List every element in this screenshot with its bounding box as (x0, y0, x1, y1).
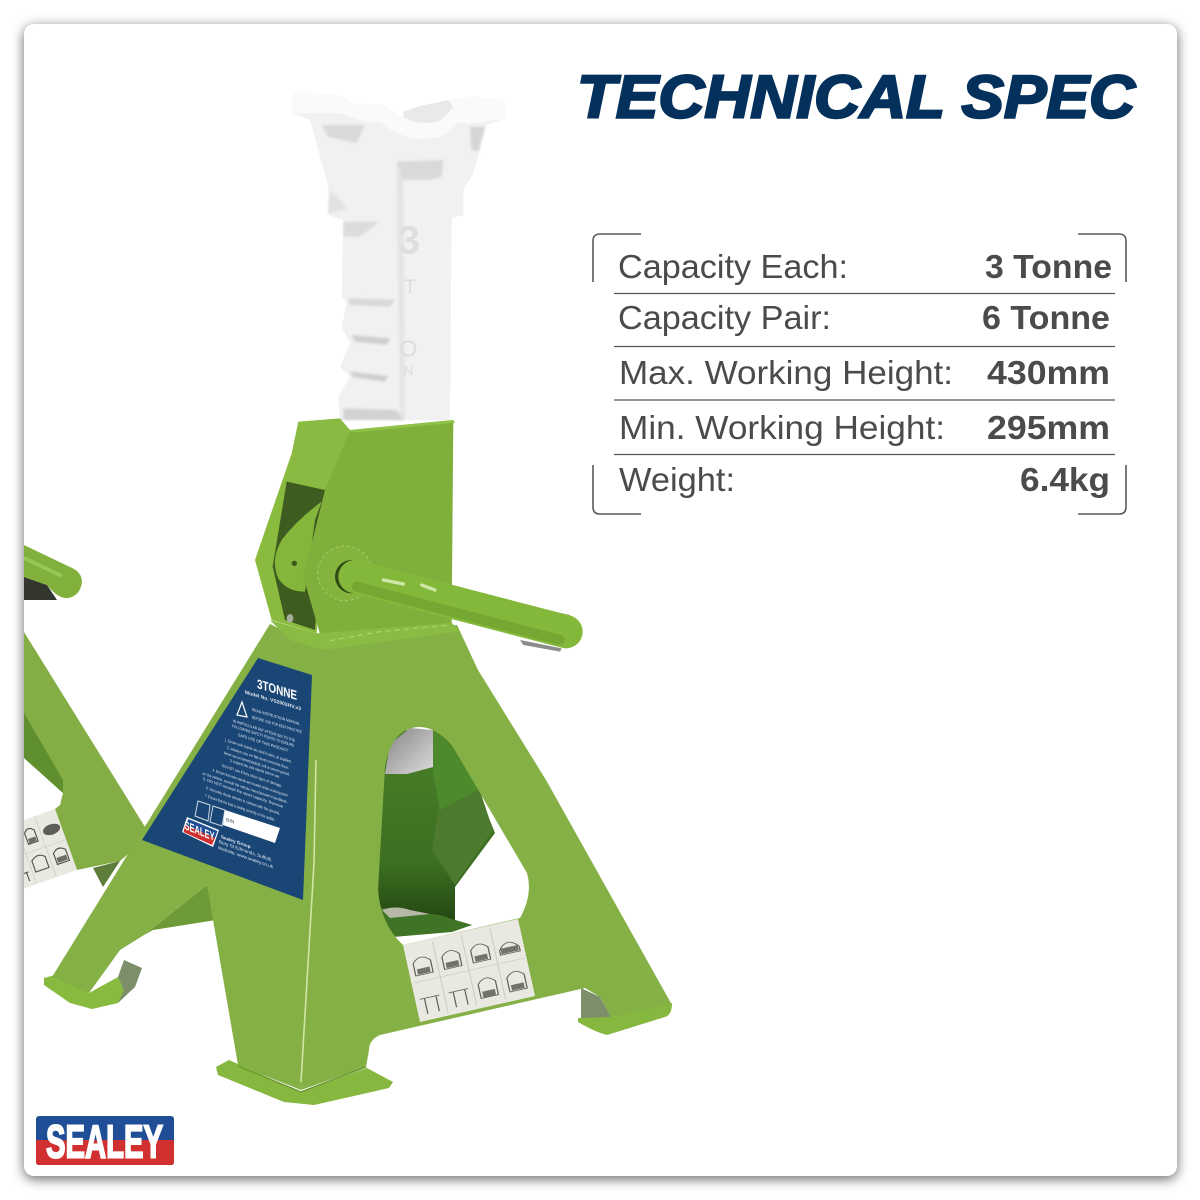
ram housing head (255, 418, 460, 650)
row: max working height: 430mm (987, 354, 1110, 391)
sticker drawings (412, 942, 528, 1014)
label text (202, 676, 302, 822)
row: capacity each: Capacity Each: (618, 248, 848, 285)
label text: 5. DO NOT exceed the rated capacity. Remove (203, 776, 284, 809)
left foot (118, 960, 142, 1003)
warning triangle icon (237, 702, 247, 717)
label Sealey logo (182, 817, 219, 847)
ram / saddle: 3 (398, 218, 420, 262)
row: capacity each: 3 Tonne (985, 248, 1112, 285)
row: capacity pair: Capacity Pair: (618, 299, 831, 336)
label text: READ INSTRUCTION MANUAL (252, 707, 301, 726)
label text: 2. Always use on flat level concrete floor. (227, 745, 289, 770)
left face of frame (52, 624, 323, 1090)
row: capacity pair (618, 299, 1110, 336)
right foot (581, 988, 611, 1020)
rear axle stand (24, 545, 145, 888)
label text: SAFE USE OF THIS PRODUCT (238, 732, 288, 753)
row: weight (619, 461, 1110, 498)
BIN field: BIN (226, 817, 235, 826)
hole interior wall (378, 730, 495, 936)
axle stands illustration (0, 92, 672, 1105)
inner notch (144, 885, 216, 935)
label address (218, 834, 274, 870)
label text: 3TONNE (257, 676, 297, 703)
label text: IN PARTICULAR PAY ATTENTION TO THE (233, 718, 295, 743)
row: capacity each (618, 248, 1112, 285)
blue warning label (142, 658, 312, 900)
label text: 6. Securely chock wheels in contact with the ground. (206, 785, 280, 816)
hole background (378, 727, 529, 945)
row: min working height (619, 409, 1110, 446)
label text: 1. Ensure axle stands are used in pairs, as supplied. (224, 737, 292, 764)
row: min working height: 295mm (987, 409, 1110, 446)
base frame (44, 624, 672, 1105)
corner brackets (593, 234, 1126, 514)
BIN field (223, 810, 280, 843)
front foot (216, 1060, 393, 1105)
label text: FOLLOWING SAFETY POINTS TO ENSURE (232, 723, 294, 748)
ram / saddle: N (404, 363, 413, 378)
side plate (255, 422, 327, 633)
label text: DO NOT use if they show signs of damage. (222, 763, 282, 788)
soft ram shading (322, 125, 485, 420)
Sealey logo: SEALEY (46, 1116, 163, 1168)
handle bar (335, 560, 570, 652)
weld collar (318, 546, 372, 601)
ram / saddle: O (399, 336, 417, 362)
base top weld seam (270, 620, 460, 650)
right face of frame (301, 625, 672, 1090)
label text: Never use on tarmac/asphalt, soft or uneven ground. (224, 750, 290, 777)
label text: on the vehicle, consult the vehicle manufacturer's handbook. (202, 771, 288, 804)
ram / saddle: T (404, 276, 416, 298)
label text: Model No. VS2003HV.v3 (245, 690, 301, 712)
label text: 3. Inspect the axle stands before use. (230, 758, 280, 779)
vehicle positioning sticker (403, 919, 535, 1022)
label address: Sealey Group (221, 834, 251, 850)
label address: Bury St Edmunds, Suffolk. (219, 839, 272, 864)
title: TECHNICAL SPEC (577, 64, 1137, 130)
pivot (275, 502, 322, 592)
rear stand vehicle sticker (24, 809, 77, 888)
label text: BEFORE USE FOR BEST PRACTICE (252, 715, 302, 735)
frame ridge highlight (301, 760, 316, 1082)
row: min working height: Min. Working Height: (619, 409, 945, 446)
row: max working height (619, 354, 1110, 391)
label text: 4. Ensure that axle stands are located under a strong point (213, 767, 288, 798)
opening (273, 482, 325, 630)
label Sealey logo: SEALEY (184, 818, 215, 844)
ram / saddle (292, 92, 507, 420)
saddle rim (292, 92, 507, 139)
Sealey logo (36, 1116, 174, 1168)
row: max working height: Max. Working Height: (619, 354, 953, 391)
row: weight: Weight: (619, 461, 735, 498)
spec table (593, 234, 1126, 514)
front plate (303, 420, 453, 634)
top face (294, 418, 350, 488)
row: capacity pair: 6 Tonne (982, 299, 1110, 336)
label address: Website: www.sealey.co.uk (218, 845, 274, 870)
label text: 7. Ensure that the load is resting correctly on the saddle. (205, 793, 275, 822)
ram visible in hole (385, 728, 433, 774)
row: weight: 6.4kg (1020, 461, 1110, 498)
safety icons (195, 801, 225, 826)
